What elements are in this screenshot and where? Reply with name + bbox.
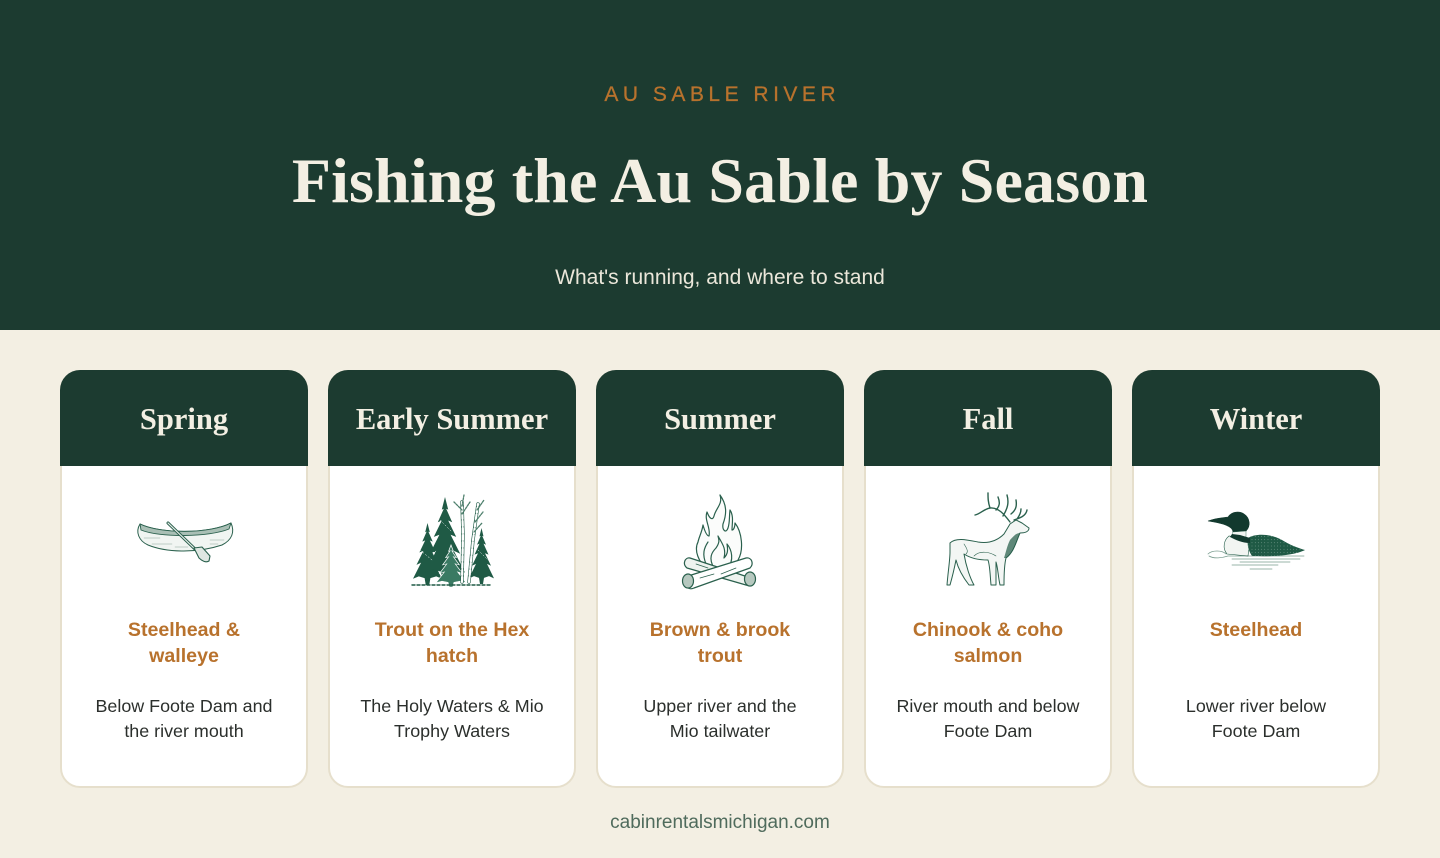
card heading: Spring: Spring	[140, 402, 228, 436]
location	[95, 696, 272, 741]
icon: pines and birches	[411, 494, 494, 587]
location: The Holy Waters & Mio	[360, 696, 544, 716]
header band	[0, 0, 1440, 330]
fish species: salmon	[954, 645, 1022, 667]
icon: canoe	[137, 521, 234, 562]
card heading: Winter: Winter	[1210, 402, 1302, 436]
card heading: Spring	[60, 370, 308, 466]
fish species: Chinook & coho	[913, 619, 1063, 641]
card heading: Fall	[864, 370, 1112, 466]
footer website: cabinrentalsmichigan.com	[610, 812, 830, 833]
fish species: Steelhead	[1210, 619, 1302, 641]
fish species: hatch	[426, 645, 478, 667]
card heading: Summer	[596, 370, 844, 466]
fish species	[913, 619, 1063, 667]
location: River mouth and below	[896, 696, 1079, 716]
location	[896, 696, 1080, 741]
location: Upper river and the	[643, 696, 797, 716]
location: the river mouth	[124, 721, 244, 741]
fish species: Brown & brook	[650, 619, 790, 641]
location: Foote Dam	[1212, 721, 1300, 741]
card: Summer	[596, 370, 844, 788]
location: Mio tailwater	[670, 721, 770, 741]
location: Foote Dam	[944, 721, 1032, 741]
location: Lower river below	[1186, 696, 1326, 716]
icon: loon	[1208, 512, 1305, 570]
icon: elk	[946, 492, 1030, 586]
title: Fishing the Au Sable by Season	[292, 145, 1148, 216]
location	[1186, 696, 1326, 741]
fish species: Trout on the Hex	[375, 619, 529, 641]
fish species: trout	[698, 645, 742, 667]
location: Trophy Waters	[394, 721, 510, 741]
card heading: Fall: Fall	[963, 402, 1013, 436]
location	[643, 696, 797, 741]
fish species: Steelhead &	[128, 619, 240, 641]
fish species	[374, 619, 529, 667]
card heading: Winter	[1132, 370, 1380, 466]
fish species	[650, 619, 790, 667]
location: Below Foote Dam and	[95, 696, 272, 716]
eyebrow label: AU SABLE RIVER	[604, 83, 840, 106]
subtitle: What's running, and where to stand	[555, 266, 885, 289]
icon: campfire	[682, 494, 756, 590]
fish species: walleye	[149, 645, 219, 667]
card heading: Early Summer: Early Summer	[356, 402, 548, 436]
card: Fall	[864, 370, 1112, 788]
card heading: Early Summer	[328, 370, 576, 466]
card heading: Summer: Summer	[664, 402, 776, 436]
fish species	[128, 619, 240, 667]
card: Spring	[60, 370, 308, 788]
card: Winter	[1132, 370, 1380, 788]
card: Early Summer	[328, 370, 576, 788]
location	[360, 696, 544, 741]
